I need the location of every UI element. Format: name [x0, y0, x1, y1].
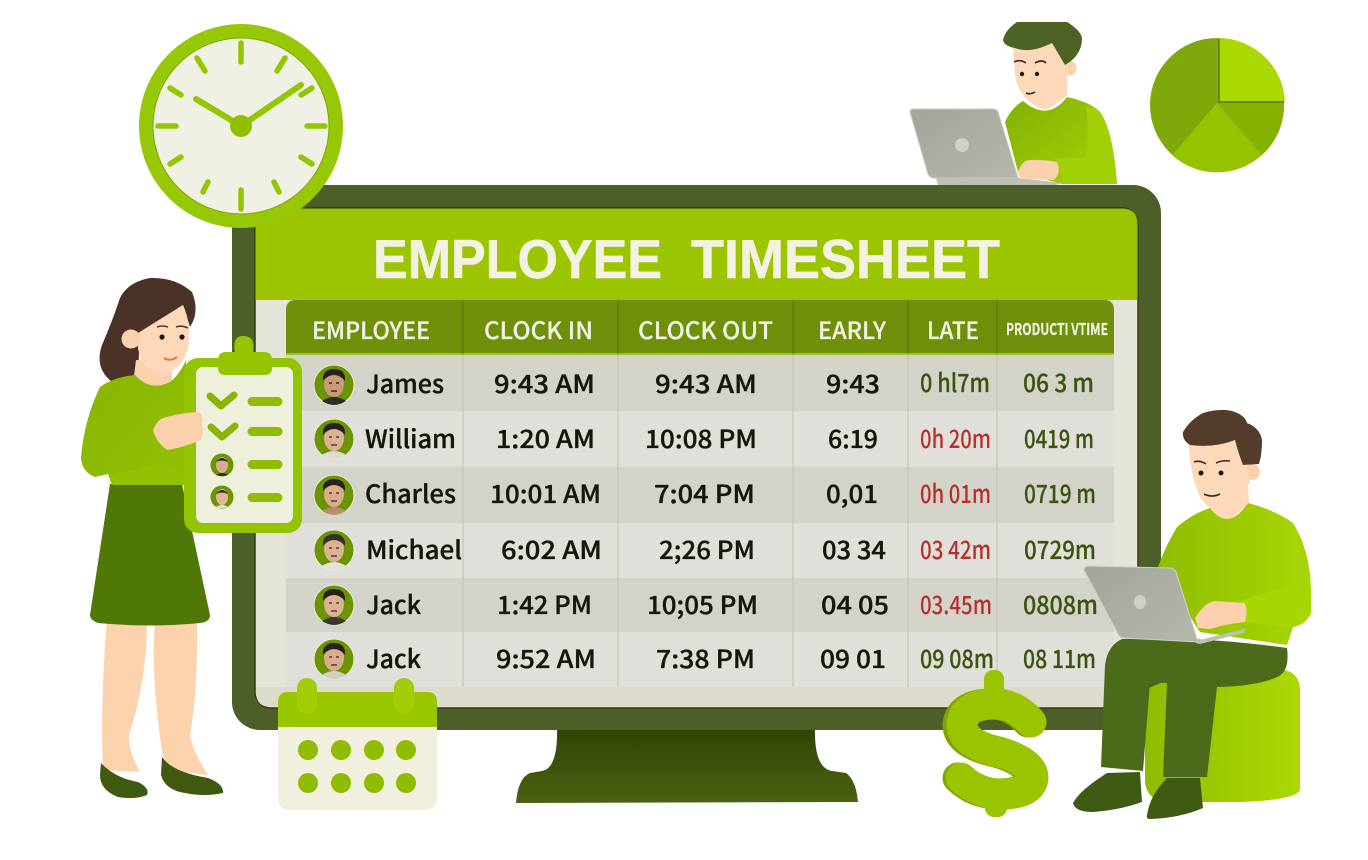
row: Jack 1: 03.45m	[920, 586, 992, 622]
ear	[1062, 60, 1076, 76]
row: Michael: 0729m	[1024, 531, 1096, 567]
sweater hem	[110, 466, 186, 485]
row: Charles: 10:01 AM	[490, 475, 601, 511]
face	[138, 305, 189, 373]
avatar: Jack 1	[314, 585, 354, 625]
row: Charles: 0,01	[826, 475, 878, 511]
table header: CLOCK OUT	[638, 311, 773, 346]
monitor	[232, 185, 1161, 730]
laptop logo	[955, 138, 969, 152]
row: Charles: 0719 m	[1024, 475, 1096, 511]
ear	[122, 330, 140, 348]
monitor stand	[516, 728, 858, 803]
table header	[286, 300, 1114, 355]
neck	[134, 360, 172, 388]
table header: EMPLOYEE	[312, 311, 430, 346]
row: Charles	[314, 475, 1096, 515]
shoes	[100, 757, 223, 798]
row: William: William	[365, 420, 456, 456]
row: James: 0 hl7m	[920, 364, 990, 400]
row: James: 9:43	[826, 365, 880, 401]
row: Jack 2: 08 11m	[1023, 640, 1096, 676]
title band	[256, 208, 1138, 300]
row: Jack 2: Jack	[366, 640, 422, 676]
eyes	[1020, 72, 1039, 76]
row: William: 10:08 PM	[645, 420, 757, 456]
row: Jack 2: 9:52 AM	[496, 640, 596, 676]
row: James	[314, 364, 1094, 405]
row: James: James	[366, 365, 444, 401]
stool	[1145, 670, 1300, 802]
monitor screen	[255, 208, 1138, 708]
face and neck	[1013, 43, 1068, 109]
icon: calendar	[278, 678, 437, 810]
avatar: Michael	[314, 530, 354, 570]
avatar: James	[314, 365, 354, 405]
row: William: 6:19	[828, 420, 878, 456]
laptop logo	[1134, 595, 1146, 609]
laptop	[910, 109, 1018, 178]
title: EMPLOYEE	[373, 228, 662, 290]
row: William: 0h 20m	[920, 420, 991, 456]
row: Michael	[314, 530, 1096, 570]
sleeve	[1055, 106, 1117, 184]
hand	[1018, 160, 1059, 180]
row: James: 9:43 AM	[655, 365, 757, 401]
title: TIMESHEET	[691, 228, 1000, 290]
row: Michael: 2;26 PM	[659, 531, 755, 567]
row: Jack 2: 09 01	[820, 640, 886, 676]
row: Michael: 6:02 AM	[501, 531, 602, 567]
sweater	[1005, 97, 1117, 184]
hair back	[100, 278, 196, 382]
clipboard	[184, 336, 302, 533]
avatar: William	[314, 419, 354, 459]
table header: LATE	[927, 311, 979, 346]
small avatar 1	[210, 454, 234, 476]
row: Michael: 03 34	[822, 531, 886, 567]
hair	[1003, 22, 1082, 65]
facial features	[157, 326, 188, 360]
trousers	[1101, 638, 1288, 777]
facial features	[1194, 461, 1230, 496]
row: Michael: Michael	[366, 531, 462, 567]
row: Jack 1: 10;05 PM	[647, 586, 758, 622]
laptop	[1084, 566, 1198, 642]
icon: pie chart	[1150, 38, 1285, 172]
clipboard board	[184, 358, 302, 533]
screen bottom strip	[256, 687, 1137, 707]
icon: dollar sign	[958, 670, 1033, 817]
row: William: 1:20 AM	[496, 420, 595, 456]
sleeve	[1240, 585, 1311, 627]
row: Charles: 7:04 PM	[654, 475, 755, 511]
check marks	[210, 395, 235, 437]
row: James: 06 3 m	[1023, 364, 1094, 400]
list lines	[252, 402, 278, 498]
sweater	[81, 360, 186, 485]
row: Charles: 0h 01m	[920, 475, 991, 511]
table header: EARLY	[818, 311, 887, 346]
skirt	[90, 484, 210, 626]
row: Jack 2	[314, 639, 1096, 679]
row: Jack 1: Jack	[366, 586, 422, 622]
row: Jack 1: 1:42 PM	[497, 586, 592, 622]
hair	[1183, 410, 1262, 465]
row: Jack 2: 7:38 PM	[656, 640, 755, 676]
table header: CLOCK IN	[484, 311, 593, 346]
character: seated man with laptop	[1073, 410, 1311, 819]
title	[373, 228, 1000, 290]
facial features	[1014, 61, 1046, 94]
table header: PRODUCTI VTIME	[1006, 316, 1108, 340]
monitor bezel	[232, 185, 1161, 730]
row: Jack 2: 09 08m	[920, 640, 994, 676]
clipboard clip	[218, 336, 272, 375]
row: Charles: Charles	[365, 475, 456, 511]
row: Michael: 03 42m	[920, 531, 991, 567]
ear	[1244, 464, 1260, 480]
row: Jack 1: 0808m	[1023, 586, 1098, 622]
character: woman holding clipboard	[81, 278, 302, 798]
shoes	[1073, 772, 1203, 819]
face and neck	[1189, 440, 1250, 524]
clipboard paper	[196, 367, 293, 523]
sweater	[1158, 503, 1311, 645]
laptop base	[936, 178, 1063, 185]
hand	[153, 412, 203, 450]
avatar: Charles	[314, 475, 354, 515]
row: William	[314, 419, 1094, 459]
avatar: Jack 2	[314, 639, 354, 679]
table row backgrounds	[286, 355, 1114, 687]
icon: wall clock	[139, 24, 343, 228]
timesheet table	[286, 300, 1114, 687]
row: James: 9:43 AM	[494, 365, 595, 401]
character: man on top of monitor	[910, 22, 1117, 185]
small avatar 2	[210, 486, 234, 508]
row: Jack 1	[314, 585, 1098, 625]
row: Jack 1: 04 05	[821, 586, 889, 622]
legs	[102, 620, 208, 775]
laptop base	[1196, 630, 1244, 643]
row: William: 0419 m	[1024, 420, 1094, 456]
hand	[1195, 601, 1246, 629]
